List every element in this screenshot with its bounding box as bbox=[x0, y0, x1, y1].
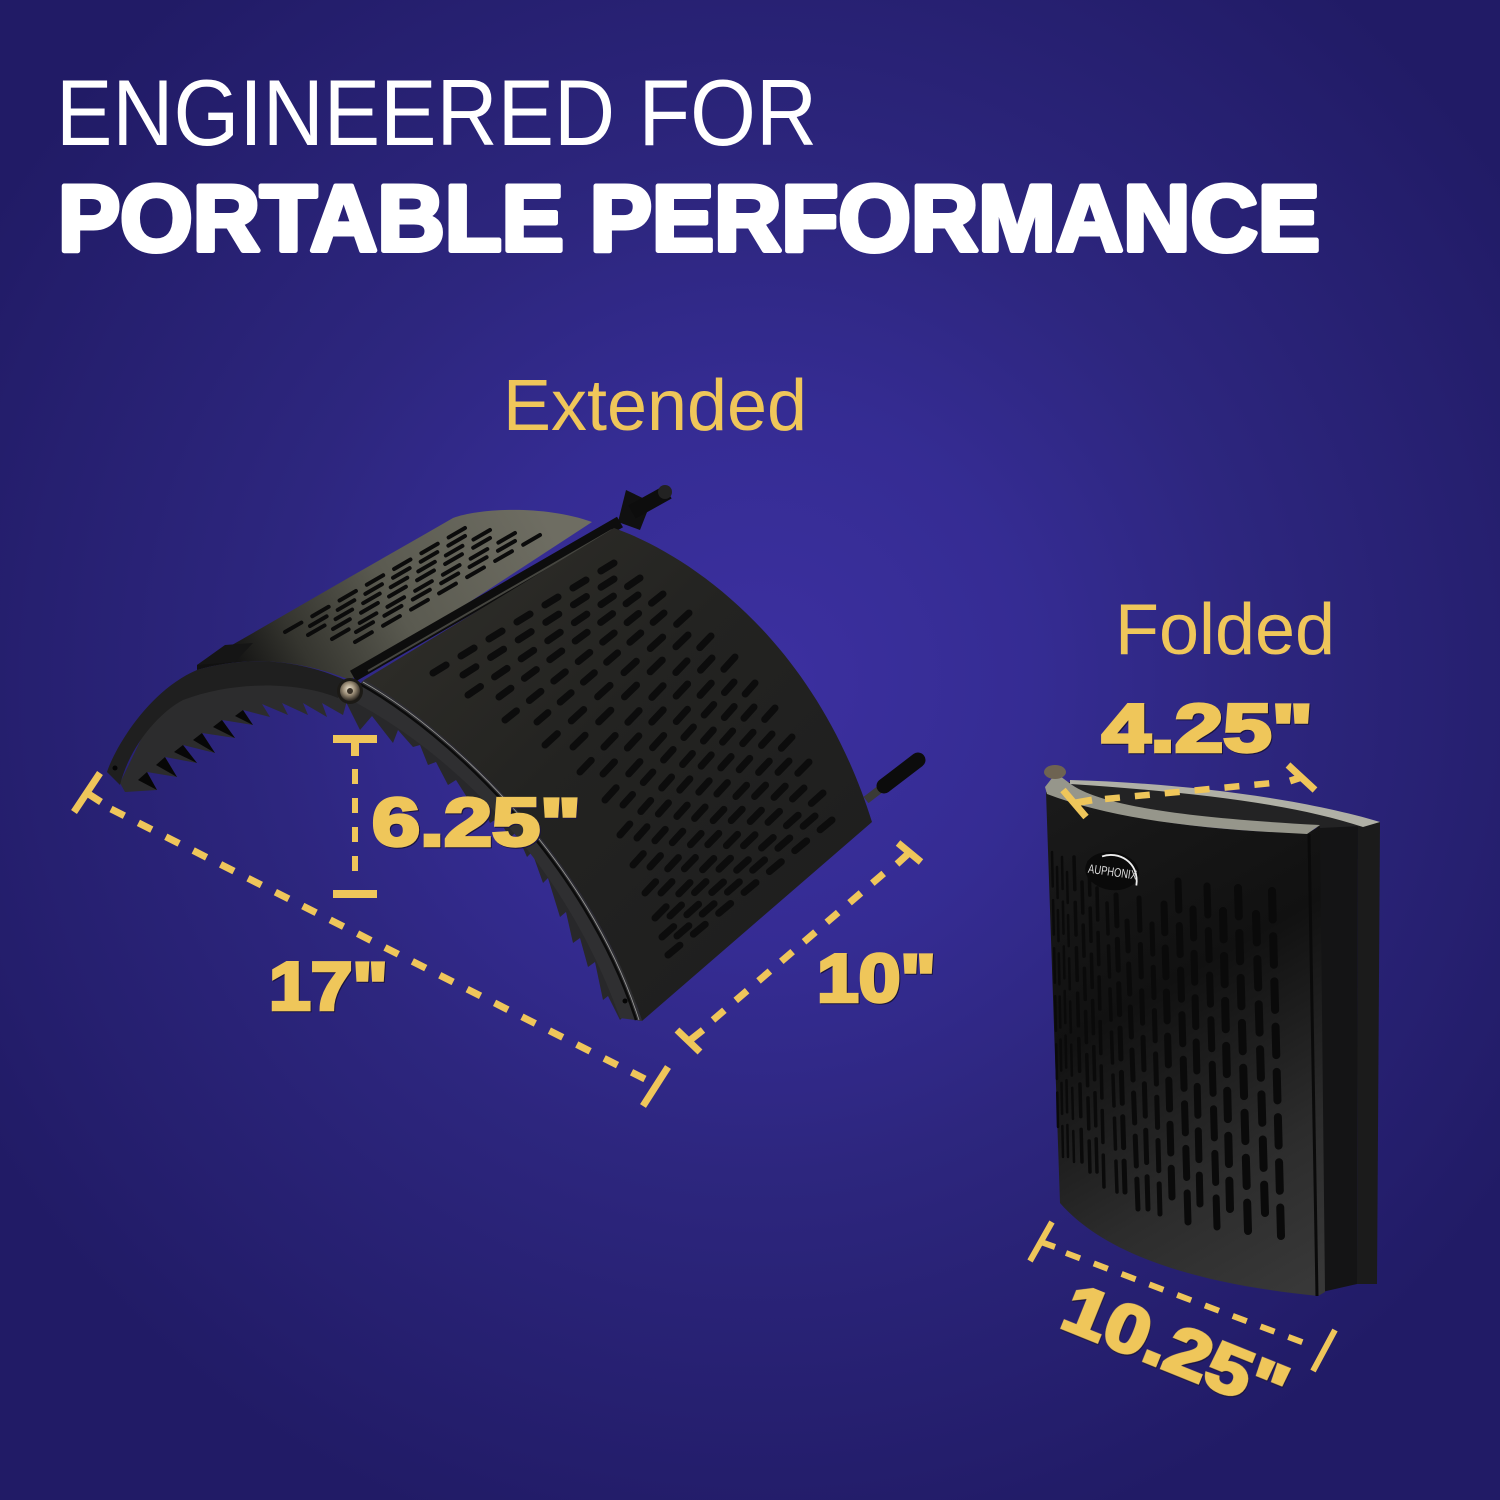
back panel bbox=[1357, 822, 1380, 1284]
heading: extended: Extended bbox=[503, 366, 807, 446]
slots bbox=[1052, 852, 1281, 1236]
label: 10.25 inch: 10.25" bbox=[1052, 1269, 1299, 1428]
dimension: 4.25 inch line bbox=[1063, 765, 1315, 817]
front panel bbox=[364, 528, 872, 1021]
label: 17 inch: 17" bbox=[269, 948, 388, 1024]
label: 6.25 inch: 6.25" bbox=[372, 784, 581, 860]
hinge bolt bbox=[337, 678, 363, 704]
bolt bbox=[1044, 765, 1066, 779]
foam tooth shadows bbox=[138, 710, 253, 790]
foam right teeth bbox=[345, 690, 640, 1020]
arch rim bbox=[107, 661, 345, 785]
front panel bbox=[1046, 792, 1325, 1296]
logo bbox=[1083, 848, 1142, 894]
heading: folded: Folded bbox=[1115, 590, 1335, 670]
top mount connector bbox=[618, 485, 672, 530]
title: PORTABLE PERFORMANCE bbox=[58, 166, 1320, 270]
top cavity foam bbox=[1068, 782, 1362, 828]
screw holes bbox=[112, 766, 628, 1004]
arch foam left bbox=[120, 670, 350, 792]
panel edge bbox=[1309, 834, 1317, 1296]
dimension: 10.25 inch line bbox=[1030, 1222, 1335, 1371]
product: extended shield bbox=[107, 485, 918, 1021]
label: 4.25 inch: 4.25" bbox=[1102, 690, 1313, 766]
side latch bbox=[197, 643, 253, 665]
title: ENGINEERED FOR bbox=[56, 60, 817, 165]
dimension: 17 inch line bbox=[74, 773, 668, 1106]
dimension: 10 inch line bbox=[677, 843, 921, 1052]
front rim bbox=[1045, 773, 1320, 834]
hinge rod bbox=[353, 522, 620, 676]
dimension: 6.25 inch line bbox=[333, 739, 377, 894]
rear panel bbox=[197, 510, 592, 680]
logo: AUPHONIX bbox=[1087, 862, 1138, 882]
front panel rim bbox=[345, 680, 642, 1021]
title bbox=[56, 60, 1320, 270]
front panel slots bbox=[433, 563, 832, 955]
rear panel slots bbox=[285, 528, 540, 642]
back rim bbox=[1070, 780, 1380, 827]
product: folded shield bbox=[1044, 765, 1380, 1296]
foam between panels bbox=[1318, 824, 1358, 1292]
label: 10 inch: 10" bbox=[817, 940, 936, 1016]
side mount connector bbox=[866, 760, 918, 800]
